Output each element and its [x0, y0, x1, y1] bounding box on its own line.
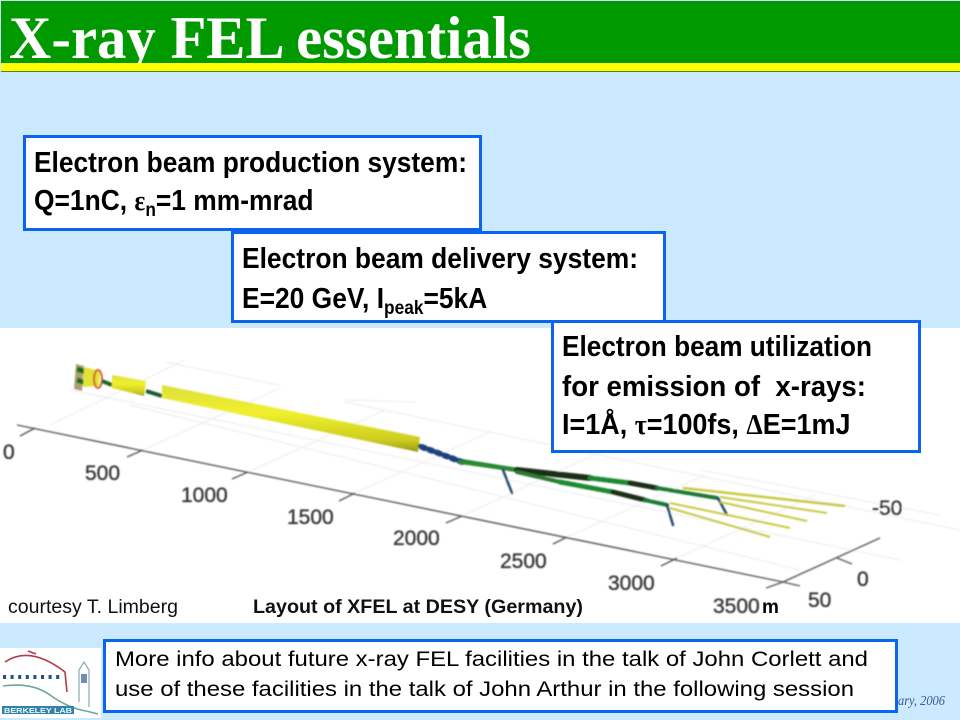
- axis labels: 500: [85, 462, 120, 485]
- logo: Berkeley Lab: BERKELEY LAB: [4, 706, 73, 715]
- axis unit: m: [762, 597, 779, 618]
- short linac section: [112, 375, 146, 396]
- box: utilization: [552, 322, 920, 452]
- credit: courtesy T. Limberg: [8, 597, 178, 618]
- box: production system: Q=1nC, ε: [34, 184, 145, 216]
- box: utilization: for emission of x-rays:: [562, 371, 866, 403]
- axis labels: 1500: [287, 506, 334, 529]
- box: delivery system: peak: [384, 297, 424, 318]
- title banner: X-ray FEL essentials: [9, 5, 531, 71]
- electron source module: [74, 364, 112, 391]
- box: delivery system: [232, 232, 664, 322]
- axis labels: [3, 441, 902, 618]
- box: delivery system: Electron beam delivery system:: [242, 243, 638, 275]
- x axis: [17, 425, 880, 588]
- box: utilization: Electron beam utilization: [562, 331, 872, 363]
- box: utilization: I=1Å, τ=100fs, ΔE=1mJ: [562, 408, 850, 440]
- footer date: ary, 2006: [898, 694, 945, 709]
- box: more info: More info about future x-ray FEL facilities in the talk of John Corlett and: [115, 648, 868, 671]
- box: production system: Electron beam production system:: [34, 147, 467, 179]
- axis labels: 3000: [608, 572, 655, 595]
- axis labels: 0: [857, 568, 869, 591]
- box: production system: =1 mm-mrad: [156, 184, 314, 216]
- box: more info: [104, 640, 896, 712]
- axis labels: 50: [808, 589, 831, 612]
- box: delivery system: E=20 GeV, I: [242, 282, 384, 314]
- logo: Berkeley Lab: [0, 648, 101, 718]
- main linac tube: [162, 385, 420, 452]
- title banner: [1, 1, 960, 72]
- axis labels: -50: [872, 497, 902, 520]
- box: delivery system: =5kA: [423, 282, 487, 314]
- axis labels: 2000: [393, 527, 440, 550]
- undulator fan: [670, 488, 845, 537]
- box: more info: use of these facilities in the talk of John Arthur in the following session: [115, 678, 854, 701]
- axis labels: 1000: [181, 484, 228, 507]
- axis labels: 3500: [713, 595, 760, 618]
- axis labels: 0: [3, 441, 15, 464]
- box: production system: n: [145, 199, 156, 220]
- plot: XFEL layout at DESY: [0, 328, 960, 623]
- box: production system: [24, 136, 480, 230]
- plot caption: Layout of XFEL at DESY (Germany): [253, 597, 583, 618]
- beamlines: [420, 446, 727, 525]
- axis labels: 2500: [500, 550, 547, 573]
